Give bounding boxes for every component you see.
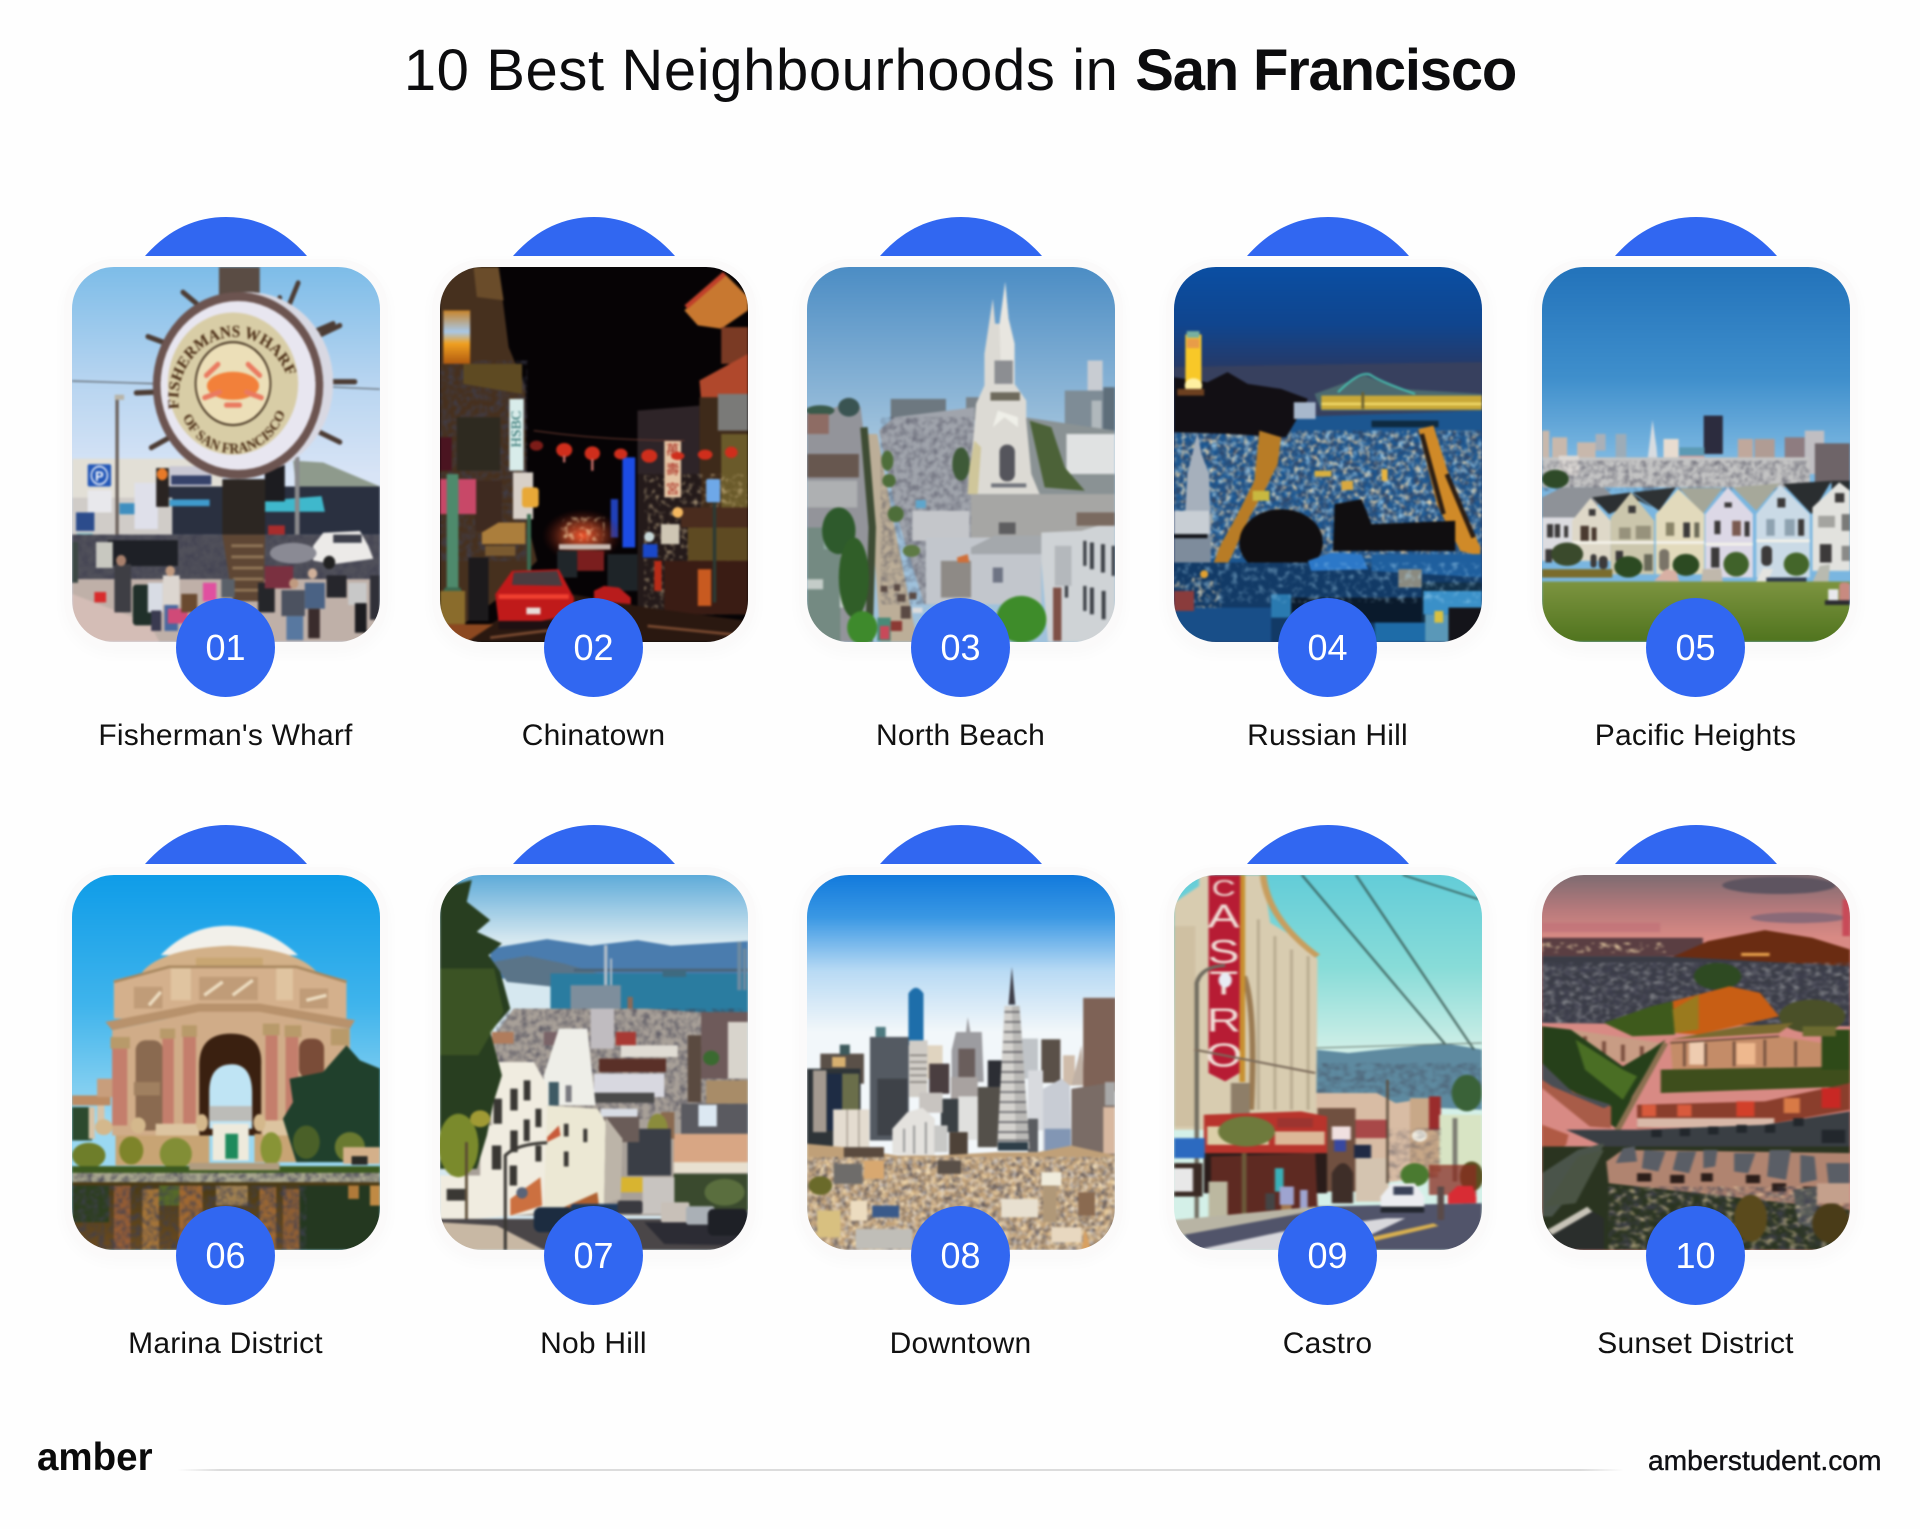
footer: amber logo: amber xyxy=(37,1436,153,1479)
number badge: 09 xyxy=(1307,1235,1348,1276)
photo: Nob Hill view to the bay xyxy=(440,875,748,1250)
lit streets xyxy=(1204,426,1480,591)
label: Chinatown xyxy=(522,719,665,752)
wires xyxy=(1302,875,1479,1050)
number badge xyxy=(911,598,1010,697)
theatre facade: S xyxy=(1208,933,1240,970)
dome accent xyxy=(1615,825,1777,864)
rooftops foreground xyxy=(807,1144,1115,1250)
street xyxy=(1174,1203,1482,1250)
card 07: Nob Hill xyxy=(440,825,748,1360)
label: Fisherman's Wharf xyxy=(98,719,353,752)
card 08: Downtown xyxy=(807,825,1115,1360)
parked cars xyxy=(534,1201,748,1236)
photo: Palace of Fine Arts xyxy=(72,875,380,1250)
lower row xyxy=(1542,1143,1850,1250)
rows of buildings xyxy=(440,1009,748,1216)
number badge: 04 xyxy=(1307,627,1348,668)
number badge: 05 xyxy=(1675,627,1716,668)
ship's wheel sign: FISHERMANS WHARF xyxy=(166,324,298,410)
number badge xyxy=(1278,1206,1377,1305)
dome accent xyxy=(513,217,675,256)
number badge xyxy=(1646,1206,1745,1305)
theatre facade: A xyxy=(1208,898,1240,935)
number badge: 07 xyxy=(573,1235,614,1276)
house row xyxy=(1542,482,1850,578)
people on the lawn xyxy=(1825,583,1850,605)
photo: Painted Ladies and skyline xyxy=(1542,267,1850,642)
number badge xyxy=(911,1206,1010,1305)
photo: North Beach church and street xyxy=(807,267,1115,642)
photo: Downtown skyline xyxy=(807,875,1115,1250)
photo: Fisherman's Wharf sign: P xyxy=(95,468,104,484)
street xyxy=(1566,1111,1850,1146)
number badge: 03 xyxy=(940,627,981,668)
dome accent xyxy=(145,825,307,864)
label: Pacific Heights xyxy=(1595,719,1796,752)
photo: Castro Theatre xyxy=(1174,875,1482,1250)
parked truck and car xyxy=(1381,1183,1476,1220)
card 01: Fisherman's Wharf xyxy=(72,217,380,752)
orange hill xyxy=(1673,986,1779,1035)
label: Castro xyxy=(1283,1327,1372,1360)
title: 10 Best Neighbourhoods in San Francisco xyxy=(404,38,1516,103)
dome accent xyxy=(880,217,1042,256)
card 04: Russian Hill xyxy=(1174,217,1482,752)
number badge xyxy=(1278,598,1377,697)
number badge xyxy=(176,598,275,697)
number badge xyxy=(544,1206,643,1305)
photo: Chinatown street at night: 壽 xyxy=(666,458,679,478)
Transamerica Pyramid xyxy=(997,967,1030,1150)
number badge: 02 xyxy=(573,627,614,668)
photo: Russian Hill at dusk xyxy=(1174,267,1482,642)
theatre facade: O xyxy=(1205,1036,1242,1074)
white row houses xyxy=(440,1062,622,1222)
label: Marina District xyxy=(128,1327,323,1360)
label: Downtown xyxy=(890,1327,1031,1360)
skyline xyxy=(1542,416,1850,491)
marquee xyxy=(1174,1111,1327,1227)
footer: website: amberstudent.com xyxy=(1648,1444,1881,1476)
card 06: Marina District xyxy=(72,825,380,1360)
middle row xyxy=(1542,1073,1611,1128)
photo: Sunset District aerial xyxy=(1542,875,1850,1250)
cypress tree xyxy=(438,880,510,1239)
skyline xyxy=(807,988,1116,1157)
photo: Chinatown street at night: 萬 xyxy=(666,439,679,459)
bushes xyxy=(1551,542,1809,578)
label: Nob Hill xyxy=(540,1327,647,1360)
ship's wheel sign xyxy=(132,279,359,480)
label: Russian Hill xyxy=(1247,719,1408,752)
number badge xyxy=(544,598,643,697)
church xyxy=(968,282,1115,539)
number badge: 10 xyxy=(1675,1235,1716,1276)
photo: Fisherman's Wharf sign xyxy=(72,267,380,642)
number badge: 06 xyxy=(205,1235,246,1276)
dome accent xyxy=(1247,825,1409,864)
number badge: 08 xyxy=(940,1235,981,1276)
terraced houses upper xyxy=(1571,1030,1661,1063)
card 03: North Beach xyxy=(807,217,1115,752)
card 10: Sunset District xyxy=(1542,825,1850,1360)
theatre facade xyxy=(1174,875,1318,1227)
dome accent xyxy=(880,825,1042,864)
red car xyxy=(495,569,631,629)
theatre facade: C xyxy=(1212,876,1236,902)
card 05: Pacific Heights xyxy=(1542,217,1850,752)
crowd xyxy=(72,540,380,640)
card 09: Castro xyxy=(1174,825,1482,1360)
pond reflection xyxy=(72,1182,380,1250)
photo: Chinatown street at night: 宮 xyxy=(666,477,679,497)
photo: Chinatown street at night xyxy=(440,267,748,642)
card 02: Chinatown xyxy=(440,217,748,752)
pine tree xyxy=(283,1045,380,1162)
label: North Beach xyxy=(876,719,1045,752)
label: Sunset District xyxy=(1597,1327,1794,1360)
dome accent xyxy=(1615,217,1777,256)
number badge xyxy=(176,1206,275,1305)
right-hand block xyxy=(648,1080,748,1211)
dome accent xyxy=(513,825,675,864)
theatre facade: T xyxy=(1209,964,1238,1002)
dome accent xyxy=(1247,217,1409,256)
number badge: 01 xyxy=(205,627,246,668)
roofs xyxy=(1542,487,1612,524)
photo: Chinatown street at night: HSBC xyxy=(508,411,524,447)
blue rooftops xyxy=(1174,411,1482,642)
theatre facade: R xyxy=(1207,1001,1241,1039)
ship's wheel sign: OF SAN FRANCISCO xyxy=(182,410,286,455)
dome accent xyxy=(145,217,307,256)
number badge xyxy=(1646,598,1745,697)
